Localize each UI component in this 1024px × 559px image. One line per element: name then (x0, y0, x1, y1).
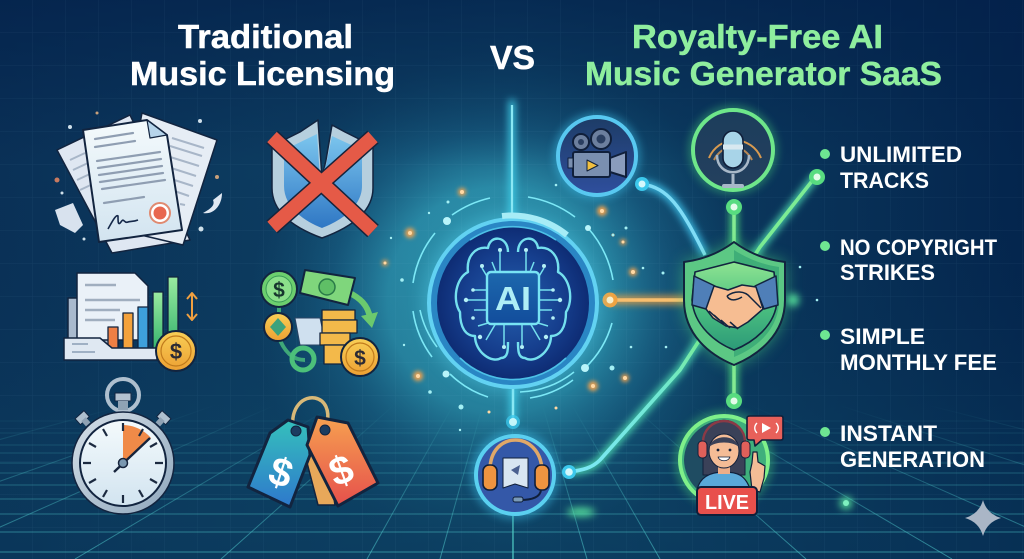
icon: money flow with coins: $ (354, 347, 366, 370)
benefit: no copyright strikes (820, 235, 998, 285)
icon: money flow with coins: $ (273, 279, 285, 302)
benefit: simple monthly fee: MONTHLY FEE (840, 350, 997, 375)
benefit: simple monthly fee (820, 324, 997, 375)
speech bubble (747, 416, 783, 446)
heading: Royalty-Free AI Music Generator SaaS: Music Generator SaaS (585, 55, 942, 92)
connector: video to shield (635, 177, 705, 255)
AI chip (487, 272, 539, 324)
heading: VS: VS (490, 39, 535, 76)
benefit: unlimited tracks: UNLIMITED (840, 142, 962, 167)
sparkles (382, 184, 852, 516)
benefit: unlimited tracks: TRACKS (840, 168, 929, 193)
connector: top vertical line (509, 100, 515, 222)
icon: broken shield with red X (272, 120, 373, 238)
heading: Traditional Music Licensing (130, 18, 395, 92)
heading: Royalty-Free AI Music Generator SaaS: Royalty-Free AI (632, 18, 883, 55)
icon: price tags (248, 398, 378, 507)
benefit: no copyright strikes: NO COPYRIGHT (840, 235, 998, 260)
icon: price tags: $ (323, 446, 359, 495)
heading: Traditional Music Licensing: Traditional (178, 18, 353, 55)
benefit: unlimited tracks (820, 142, 962, 193)
live badge: LIVE (705, 492, 749, 514)
benefit: instant generation (820, 421, 985, 472)
icon: invoice and bar chart with coin: $ (170, 339, 182, 364)
connector: AI to shield orange (602, 292, 690, 308)
icon: sparkle star (965, 500, 1001, 536)
benefit: no copyright strikes: STRIKES (840, 260, 935, 285)
benefit: instant generation: INSTANT (840, 421, 938, 446)
orbit arcs (413, 197, 613, 398)
icon: contract paperwork (54, 112, 222, 253)
icon: invoice and bar chart with coin (64, 273, 197, 371)
icon: microphone circle (688, 105, 778, 195)
icon: stopwatch (72, 379, 174, 514)
heading: Traditional Music Licensing: Music Licensing (130, 55, 395, 92)
icon: video camera circle (553, 112, 641, 200)
brain circuit outline (456, 239, 570, 360)
AI chip: AI (495, 280, 531, 317)
icon: headset circle (470, 430, 560, 520)
connector: mic and live vertical line (726, 199, 742, 409)
benefit: simple monthly fee: SIMPLE (840, 324, 925, 349)
icon: money flow with coins (261, 270, 379, 376)
icon: shield with handshake (684, 242, 785, 365)
heading: Royalty-Free AI Music Generator SaaS (585, 18, 942, 92)
icon: price tags: $ (263, 449, 298, 497)
AI brain hub (413, 197, 613, 398)
icon: live streamer circle (674, 410, 783, 515)
connector: headset to shield to top right node (562, 169, 825, 479)
benefit: instant generation: GENERATION (840, 447, 985, 472)
connector: AI to headset (506, 385, 520, 559)
handshake (692, 276, 778, 329)
